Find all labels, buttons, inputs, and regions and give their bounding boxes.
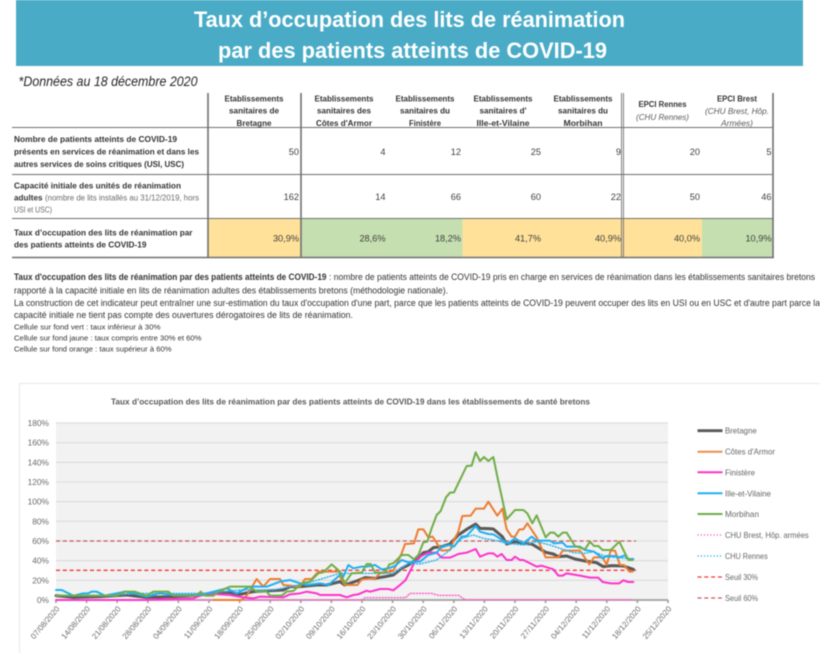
legend: Bretagne (698, 426, 757, 436)
row labels: autres services de soins critiques (USI, USC) (14, 159, 184, 169)
x axis labels: 09/10/2020 (304, 604, 337, 641)
row labels: adultes (14, 192, 43, 202)
series: Ille-et-Vilaine (56, 526, 633, 597)
values: patients: 20 (690, 147, 700, 157)
table rules (12, 93, 774, 258)
legend: Côtes d'Armor (698, 447, 775, 457)
legend: Bretagne: Bretagne (725, 426, 757, 436)
values: occupancy rate: 40,9% (595, 234, 621, 244)
legend: Finistère: Finistère (725, 467, 755, 477)
x axis labels: 13/11/2020 (458, 604, 490, 641)
y axis labels: 140% (28, 457, 50, 467)
chart legend (698, 426, 809, 603)
legend: Côtes d'Armor: Côtes d'Armor (725, 447, 775, 457)
x axis labels: 25/12/2020 (641, 604, 674, 641)
series: Finistère (56, 549, 633, 600)
series lines (56, 452, 633, 600)
column headers: sanitaires d' (480, 106, 526, 116)
definition text: La construction de cet indicateur peut entraîner une sur-estimation du taux d'occupation d'une part, parce que les patients atteints de COVID-19 peuvent occuper des lits en USI ou en USC et d'autre part parce la (14, 298, 820, 308)
row labels: Capacité initiale des unités de réanimation (14, 180, 181, 190)
values: capacity: 22 (611, 192, 621, 202)
column headers: sanitaires du (400, 106, 450, 116)
values: capacity: 162 (284, 192, 299, 202)
column headers: sanitaires de (229, 106, 279, 116)
values: patients: 25 (531, 147, 541, 157)
column headers: sanitaires du (558, 106, 608, 116)
x axis labels: 18/09/2020 (212, 604, 245, 641)
values: capacity: 66 (451, 192, 461, 202)
column headers: (CHU Rennes) (636, 112, 689, 122)
x axis labels (29, 604, 674, 641)
definition text: Cellule sur fond orange : taux supérieur à 60% (14, 344, 172, 354)
column headers: Etablissements (554, 94, 613, 104)
values: patients: 12 (451, 147, 461, 157)
threshold line 30% (56, 569, 636, 571)
legend: Seuil 60%: Seuil 60% (725, 593, 758, 603)
column headers: Etablissements (224, 94, 284, 104)
date note: *Données au 18 décembre 2020 (18, 74, 198, 89)
x axis labels: 28/08/2020 (121, 604, 154, 641)
title banner (16, 0, 803, 66)
legend: Seuil 30% (698, 572, 758, 582)
definition text: Cellule sur fond vert : taux inférieur à 30% (14, 322, 161, 332)
column headers: EPCI Rennes (638, 99, 687, 109)
y axis labels: 0% (37, 595, 50, 605)
definition text: : nombre de patients atteints de COVID-19 pris en charge en services de réanimation dans les établissements sanitaires bretons (329, 272, 816, 282)
x axis labels: 30/10/2020 (396, 604, 429, 641)
legend: Finistère (698, 467, 755, 477)
values: occupancy rate: 40,0% (674, 234, 700, 244)
column headers: Ille-et-Vilaine (476, 118, 530, 128)
x axis labels: 11/09/2020 (182, 604, 215, 641)
values: patients: 9 (616, 147, 621, 157)
x axis labels: 18/12/2020 (610, 604, 643, 641)
y axis labels: 80% (32, 516, 50, 526)
values: occupancy rate: 30,9% (273, 234, 299, 244)
x axis labels: 11/12/2020 (580, 604, 613, 641)
values: capacity: 14 (375, 192, 386, 202)
y axis labels: 180% (28, 418, 50, 428)
legend: CHU Brest: CHU Brest, Hôp. armées (725, 530, 809, 540)
y axis labels: 20% (32, 575, 50, 585)
values: capacity: 46 (761, 192, 772, 202)
definition text: Taux d'occupation des lits de réanimation par des patients atteints de COVID-19 (14, 272, 327, 282)
legend: Seuil 60% (698, 593, 758, 603)
legend: Seuil 30%: Seuil 30% (725, 572, 758, 582)
x axis labels: 06/11/2020 (427, 604, 460, 641)
data table (12, 93, 774, 258)
definition text (14, 272, 820, 354)
row labels: (nombre de lits installés au 31/12/2019, hors (45, 194, 199, 202)
row labels: présents en services de réanimation et dans les (14, 146, 199, 156)
x axis labels: 04/12/2020 (549, 604, 582, 641)
column headers: sanitaires des (317, 106, 371, 116)
values: capacity: 60 (531, 192, 541, 202)
x axis labels: 25/09/2020 (243, 604, 276, 641)
threshold line 60% (56, 540, 636, 542)
x axis labels: 07/08/2020 (29, 604, 62, 641)
series: Morbihan (56, 452, 633, 596)
x axis labels: 20/11/2020 (488, 604, 521, 641)
row labels: des patients atteints de COVID-19 (14, 240, 147, 250)
x axis labels: 27/11/2020 (519, 604, 551, 641)
y axis labels: 40% (32, 556, 50, 566)
row labels: USI et USC) (14, 206, 52, 214)
x axis labels: 23/10/2020 (365, 604, 398, 641)
values: occupancy rate: 28,6% (359, 234, 386, 244)
chart title: Taux d’occupation des lits de réanimation par des patients atteints de COVID-19 dans les établissements de santé bretons (111, 398, 591, 406)
series: Bretagne (56, 524, 633, 597)
y axis labels: 60% (32, 536, 50, 546)
legend: CHU Brest (698, 530, 809, 540)
legend: Morbihan: Morbihan (725, 509, 759, 519)
column headers: Armées) (720, 118, 753, 128)
values: patients: 4 (380, 147, 386, 157)
series: Côtes d'Armor (213, 502, 633, 600)
row labels: Nombre de patients atteints de COVID-19 (14, 134, 177, 144)
x axis labels: 04/09/2020 (151, 604, 184, 641)
chart frame (20, 384, 820, 653)
x axis labels: 02/10/2020 (274, 604, 307, 641)
legend: Ille-et-Vilaine (698, 488, 771, 498)
y axis labels: 100% (28, 497, 50, 507)
legend: Ille-et-Vilaine: Ille-et-Vilaine (725, 488, 771, 498)
column headers: Etablissements (396, 94, 455, 104)
values: occupancy rate: 41,7% (515, 234, 541, 244)
definition text: capacité initiale ne tient pas compte des ouvertures dérogatoires de lits de réanimation. (14, 310, 353, 320)
y axis labels: 160% (28, 438, 50, 448)
row labels (14, 134, 199, 250)
legend: CHU Rennes (698, 551, 768, 561)
x axis labels: 21/08/2020 (90, 604, 123, 641)
column headers: Côtes d'Armor (316, 118, 373, 128)
column headers: Etablissements (314, 94, 374, 104)
y axis labels: 120% (28, 477, 50, 487)
line chart panel (20, 384, 820, 653)
values: patients: 50 (289, 147, 299, 157)
values: capacity: 50 (690, 192, 700, 202)
x axis line and ticks (56, 600, 668, 603)
row labels: Taux d’occupation des lits de réanimation par (14, 228, 193, 238)
column headers: Morbihan (564, 118, 602, 128)
column headers (224, 94, 769, 128)
definition text: Cellule sur fond jaune : taux compris entre 30% et 60% (14, 334, 202, 342)
x axis labels: 16/10/2020 (335, 604, 368, 641)
values: occupancy rate (273, 234, 772, 244)
values: patients: 5 (766, 147, 772, 157)
legend: CHU Rennes: CHU Rennes (725, 551, 768, 561)
values: patients (289, 147, 772, 157)
series: CHU Rennes (56, 535, 633, 596)
values: occupancy rate: 18,2% (435, 234, 461, 244)
highlighted rate row backgrounds (208, 218, 773, 257)
values: capacity (284, 192, 772, 202)
legend: Morbihan (698, 509, 759, 519)
column headers: (CHU Brest, Hôp. (705, 106, 769, 116)
series: CHU Brest (56, 593, 633, 600)
column headers: Finistère (409, 118, 441, 128)
title banner: par des patients atteints de COVID-19 (218, 38, 607, 63)
definition text: rapporté à la capacité initiale en lits de réanimation adultes des établissements bretons (méthodologie nationale). (14, 286, 448, 296)
plot area (56, 423, 668, 600)
y axis labels (28, 418, 50, 605)
x axis labels: 14/08/2020 (59, 604, 92, 641)
column headers: Etablissements (474, 94, 533, 104)
column headers: Bretagne (236, 118, 272, 128)
title banner: Taux d’occupation des lits de réanimation (194, 7, 625, 32)
values: occupancy rate: 10,9% (745, 234, 772, 244)
column headers: EPCI Brest (717, 94, 757, 104)
